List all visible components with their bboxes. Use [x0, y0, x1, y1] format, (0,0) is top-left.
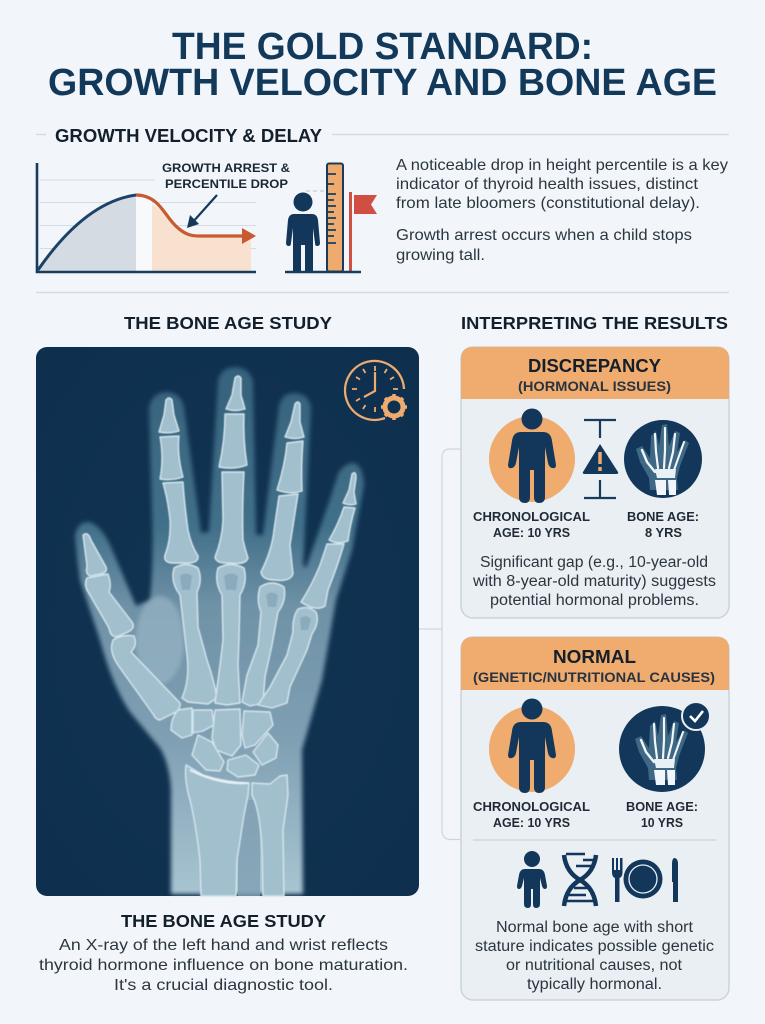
panel: discrepancy card: (HORMONAL ISSUES): [518, 378, 671, 394]
heading: growth velocity and delay: GROWTH VELOCITY & DELAY: [55, 125, 323, 146]
icon: fork plate knife: [612, 858, 678, 902]
radius: [186, 765, 249, 896]
card heading: DISCREPANCY: [528, 355, 662, 376]
text: growth explanation: growing tall.: [396, 247, 485, 264]
growth chart: GROWTH ARREST &: [162, 161, 290, 175]
caption: the bone age study: [39, 911, 408, 994]
title: GROWTH VELOCITY AND BONE AGE: [48, 62, 717, 104]
panel: normal card: [461, 637, 729, 1000]
card heading: NORMAL: [553, 646, 636, 667]
little finger bones: [343, 473, 356, 505]
labels: ages: 10 YRS: [641, 815, 683, 830]
text: growth explanation: A noticeable drop in height percentile is a key: [396, 157, 728, 174]
metacarpal head shading: [180, 574, 311, 630]
labels: ages: CHRONOLOGICAL: [473, 509, 590, 524]
caption: the bone age study: thyroid hormone influence on bone maturation.: [39, 957, 408, 974]
text: normal explanation: typically hormonal.: [527, 976, 662, 993]
icon: child beside height ruler with flag: [285, 164, 377, 272]
text: normal explanation: stature indicates possible genetic: [475, 938, 714, 955]
text: discrepancy explanation: Significant gap (e.g., 10-year-old: [480, 554, 708, 571]
text: discrepancy explanation: potential hormonal problems.: [490, 592, 699, 609]
text: growth explanation: from late bloomers (constitutional delay).: [396, 195, 700, 212]
panel: discrepancy card: [461, 347, 729, 618]
labels: ages: AGE: 10 YRS: [493, 815, 570, 830]
connector bracket: [419, 449, 461, 840]
panel: hand x-ray: [36, 347, 419, 896]
text: normal explanation: [475, 919, 714, 993]
icon: child: [517, 851, 547, 908]
panel: normal card: (GENETIC/NUTRITIONAL CAUSES): [473, 669, 715, 685]
ulna: [252, 775, 288, 896]
icon: bone age hand: [624, 420, 702, 498]
thumb bones: [83, 534, 106, 576]
index finger bones: [159, 398, 179, 433]
labels: ages: [473, 509, 699, 540]
hand bones: [83, 376, 356, 896]
icon: clock and gear: [345, 361, 407, 420]
text: normal explanation: or nutritional causes, not: [506, 957, 683, 974]
palm glow: [136, 596, 184, 684]
icon: chronological age person: [489, 698, 575, 793]
growth chart: PERCENTILE DROP: [165, 177, 288, 191]
icon: chronological age person: [489, 408, 575, 503]
labels: ages: 8 YRS: [645, 525, 682, 540]
title: THE GOLD STANDARD:: [172, 26, 593, 68]
soft tissue: [75, 367, 364, 894]
labels: ages: AGE: 10 YRS: [493, 525, 570, 540]
caption: the bone age study: It's a crucial diagnostic tool.: [114, 977, 333, 994]
icon: normal bone age hand with check: [619, 702, 710, 792]
text: discrepancy explanation: with 8-year-old maturity) suggests: [472, 573, 716, 590]
title: [48, 26, 717, 104]
labels: ages: BONE AGE:: [626, 799, 698, 814]
growth chart: [37, 161, 290, 272]
text: normal explanation: Normal bone age with short: [496, 919, 694, 936]
heading: interpreting the results: INTERPRETING THE RESULTS: [461, 313, 728, 333]
caption: the bone age study: An X-ray of the left hand and wrist reflects: [59, 937, 388, 954]
text: growth explanation: [396, 157, 728, 264]
heading: the bone age study: THE BONE AGE STUDY: [124, 313, 332, 333]
icon: dna helix: [564, 854, 596, 906]
text: growth explanation: Growth arrest occurs when a child stops: [396, 227, 692, 244]
text: growth explanation: indicator of thyroid health issues, distinct: [396, 176, 699, 193]
labels: ages: [473, 799, 698, 830]
text: discrepancy explanation: [472, 554, 716, 609]
ring finger bones: [285, 402, 304, 438]
labels: ages: BONE AGE:: [627, 509, 699, 524]
icon: gap warning marker: [583, 420, 618, 498]
labels: ages: CHRONOLOGICAL: [473, 799, 590, 814]
carpal bones: [171, 708, 192, 738]
middle finger bones: [226, 376, 245, 410]
caption: the bone age study: THE BONE AGE STUDY: [121, 911, 326, 931]
